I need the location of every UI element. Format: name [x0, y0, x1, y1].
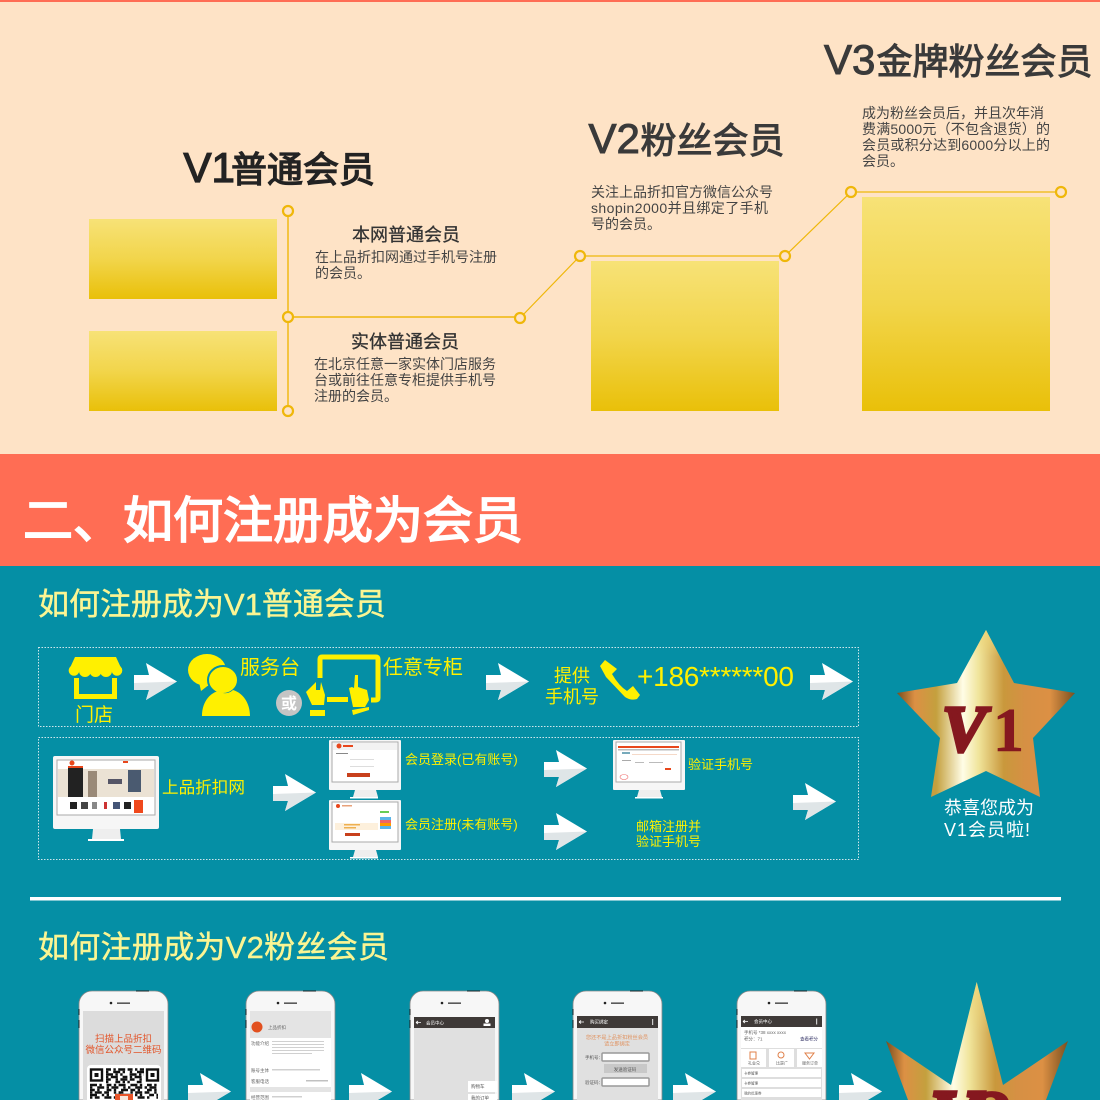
monitor: homepage [53, 756, 159, 841]
phone 4: bind phone number: 验证码： [585, 1079, 603, 1086]
section title: 二、如何注册成为会员 [23, 493, 523, 549]
monitor: login [329, 740, 401, 798]
phone 5: member center: 卡券管理 [744, 1070, 758, 1076]
arrow [793, 783, 836, 820]
phone 5: member center: 会员中心 [754, 1018, 772, 1025]
arrow [273, 774, 316, 811]
text block: V3 description: 会员。 [862, 153, 904, 169]
arrow [486, 663, 529, 700]
label: email registration [636, 819, 701, 849]
QR code [87, 1065, 161, 1100]
phone 1: QR code [78, 990, 168, 1100]
congratulation text [944, 798, 1034, 840]
phone 4: bind phone number [572, 990, 662, 1100]
arrow [134, 663, 177, 700]
phone 5: member center: 积分：71 [744, 1036, 763, 1042]
phone 5: member center: 礼金兑 [748, 1060, 760, 1066]
phone 1 caption: 微信公众号二维码 [85, 1044, 162, 1056]
label: provide phone number [545, 666, 599, 707]
phone 2: official account: 账号主体 [251, 1067, 269, 1074]
label: member registration: 会员注册(未有账号) [405, 817, 518, 832]
label: email registration: 验证手机号 [636, 834, 701, 849]
phone 5: member center: 手机号 *38 xxxx xxxx [744, 1029, 787, 1036]
label: member login: 会员登录(已有账号) [405, 752, 518, 767]
label: shopin site: 上品折扣网 [162, 778, 245, 797]
phone 5: member center: 服务订单 [802, 1060, 818, 1066]
top border line [0, 0, 1100, 2]
heading: V3: 金牌粉丝会员 [876, 41, 1093, 82]
text block: store member: 实体普通会员 [351, 332, 459, 352]
icon: touch tablet [306, 657, 378, 716]
arrow [188, 1073, 231, 1100]
phone 4: bind phone number: 请立即绑定 [604, 1040, 630, 1048]
icon: handset [600, 660, 640, 700]
level connector line with nodes [283, 187, 1066, 416]
panel: membership levels background [0, 0, 1100, 454]
icon: service person [188, 654, 250, 716]
badge: V2 star [886, 982, 1068, 1100]
arrow [544, 813, 587, 850]
badge: V1 star: 1 [993, 697, 1024, 765]
section banner [0, 454, 1100, 566]
text block: V3 description: 成为粉丝会员后，并且次年消 [862, 105, 1044, 121]
heading: V2: V2 [588, 115, 640, 162]
panel: in-store flow [38, 648, 858, 726]
phone 2: official account: 客服电话 [251, 1078, 269, 1085]
text block: online member: 的会员。 [315, 265, 371, 281]
phone 2: official account: 经营范围 [251, 1094, 269, 1100]
phone 1 caption [85, 1033, 162, 1056]
bar: V3 [862, 197, 1050, 411]
heading: V2: 粉丝会员 [640, 120, 785, 161]
phone 4: bind phone number: 手机号： [585, 1054, 603, 1061]
label: store: 门店 [75, 704, 113, 726]
label: provide phone number: 提供 [554, 666, 590, 686]
icon: or badge: 或 [281, 694, 297, 713]
phone 4: bind phone number: 购买绑定 [590, 1018, 608, 1026]
label: provide phone number: 手机号 [545, 687, 599, 707]
arrow [673, 1073, 716, 1100]
phone 4: bind phone number: 发送验证码 [614, 1066, 637, 1073]
badge: V1 star [897, 630, 1075, 797]
bar: V1 online [89, 219, 277, 299]
phone 1 caption: 扫描上品折扣 [95, 1033, 152, 1045]
text block: V3 description: 费满5000元（不包含退货）的 [862, 121, 1050, 137]
arrow [839, 1073, 882, 1100]
text block: V2 description [591, 184, 773, 232]
text block: store member [314, 332, 496, 404]
phone 5: member center [736, 990, 826, 1100]
text block: online member [315, 225, 497, 281]
text block: V2 description: 号的会员。 [591, 216, 661, 232]
arrow [810, 663, 853, 700]
text block: store member: 台或前往任意专柜提供手机号 [314, 372, 496, 388]
phone 3: member center menu [410, 990, 499, 1100]
heading: V1: 普通会员 [231, 149, 375, 190]
heading: how to register V2: 如何注册成为V2粉丝会员 [38, 930, 389, 965]
phone 2: official account: 上品折扣 [268, 1024, 286, 1031]
phone 5: member center: 我的优惠券 [744, 1090, 762, 1096]
congratulation text: V1会员啦! [944, 820, 1030, 840]
phone 3: member center menu: 会员中心 [426, 1020, 444, 1026]
monitor: register [329, 800, 401, 858]
text block: online member: 在上品折扣网通过手机号注册 [315, 249, 497, 265]
text block: V2 description: shopin2000并且绑定了手机 [591, 200, 768, 216]
congratulation text: 恭喜您成为 [944, 798, 1034, 818]
text block: V3 description: 会员或积分达到6000分以上的 [862, 137, 1050, 153]
heading: V1: V1 [184, 144, 235, 191]
phone 5: member center: 比是广 [776, 1060, 788, 1066]
divider [30, 897, 1061, 900]
label: verify phone: 验证手机号 [688, 757, 753, 772]
label: any counter: 任意专柜 [383, 656, 463, 679]
bar: V1 store [89, 331, 277, 411]
panel: online flow [38, 738, 858, 860]
heading: V3: V3 [824, 36, 875, 83]
text block: V3 description [862, 105, 1050, 169]
arrow [544, 750, 587, 787]
text block: store member: 在北京任意一家实体门店服务 [314, 356, 496, 372]
phone 2: official account: 功能介绍 [251, 1040, 269, 1047]
icon: or badge [276, 690, 302, 716]
phone 3: member center menu: 购物车 [471, 1083, 485, 1090]
text block: V2 description: 关注上品折扣官方微信公众号 [591, 184, 773, 200]
text block: store member: 注册的会员。 [314, 388, 398, 404]
phone 5: member center: 查看积分 [800, 1036, 818, 1042]
icon: shop [69, 657, 122, 699]
phone 4: bind phone number: 您还不是上品折扣粉丝会员 [586, 1033, 648, 1041]
phone 5: member center: 卡券管理 [744, 1080, 758, 1086]
monitor: verify phone [613, 740, 685, 798]
text block: online member: 本网普通会员 [352, 225, 460, 245]
phone number: +186******00 [637, 661, 794, 692]
heading: how to register V1: 如何注册成为V1普通会员 [38, 587, 386, 622]
arrow [512, 1073, 555, 1100]
panel: registration background [0, 566, 1100, 1100]
badge: V1 star: V [942, 693, 991, 766]
bar: V2 [591, 261, 779, 411]
label: service desk: 服务台 [240, 656, 300, 679]
phone 2: official account [246, 990, 335, 1100]
label: email registration: 邮箱注册并 [636, 819, 701, 834]
arrow [349, 1073, 392, 1100]
